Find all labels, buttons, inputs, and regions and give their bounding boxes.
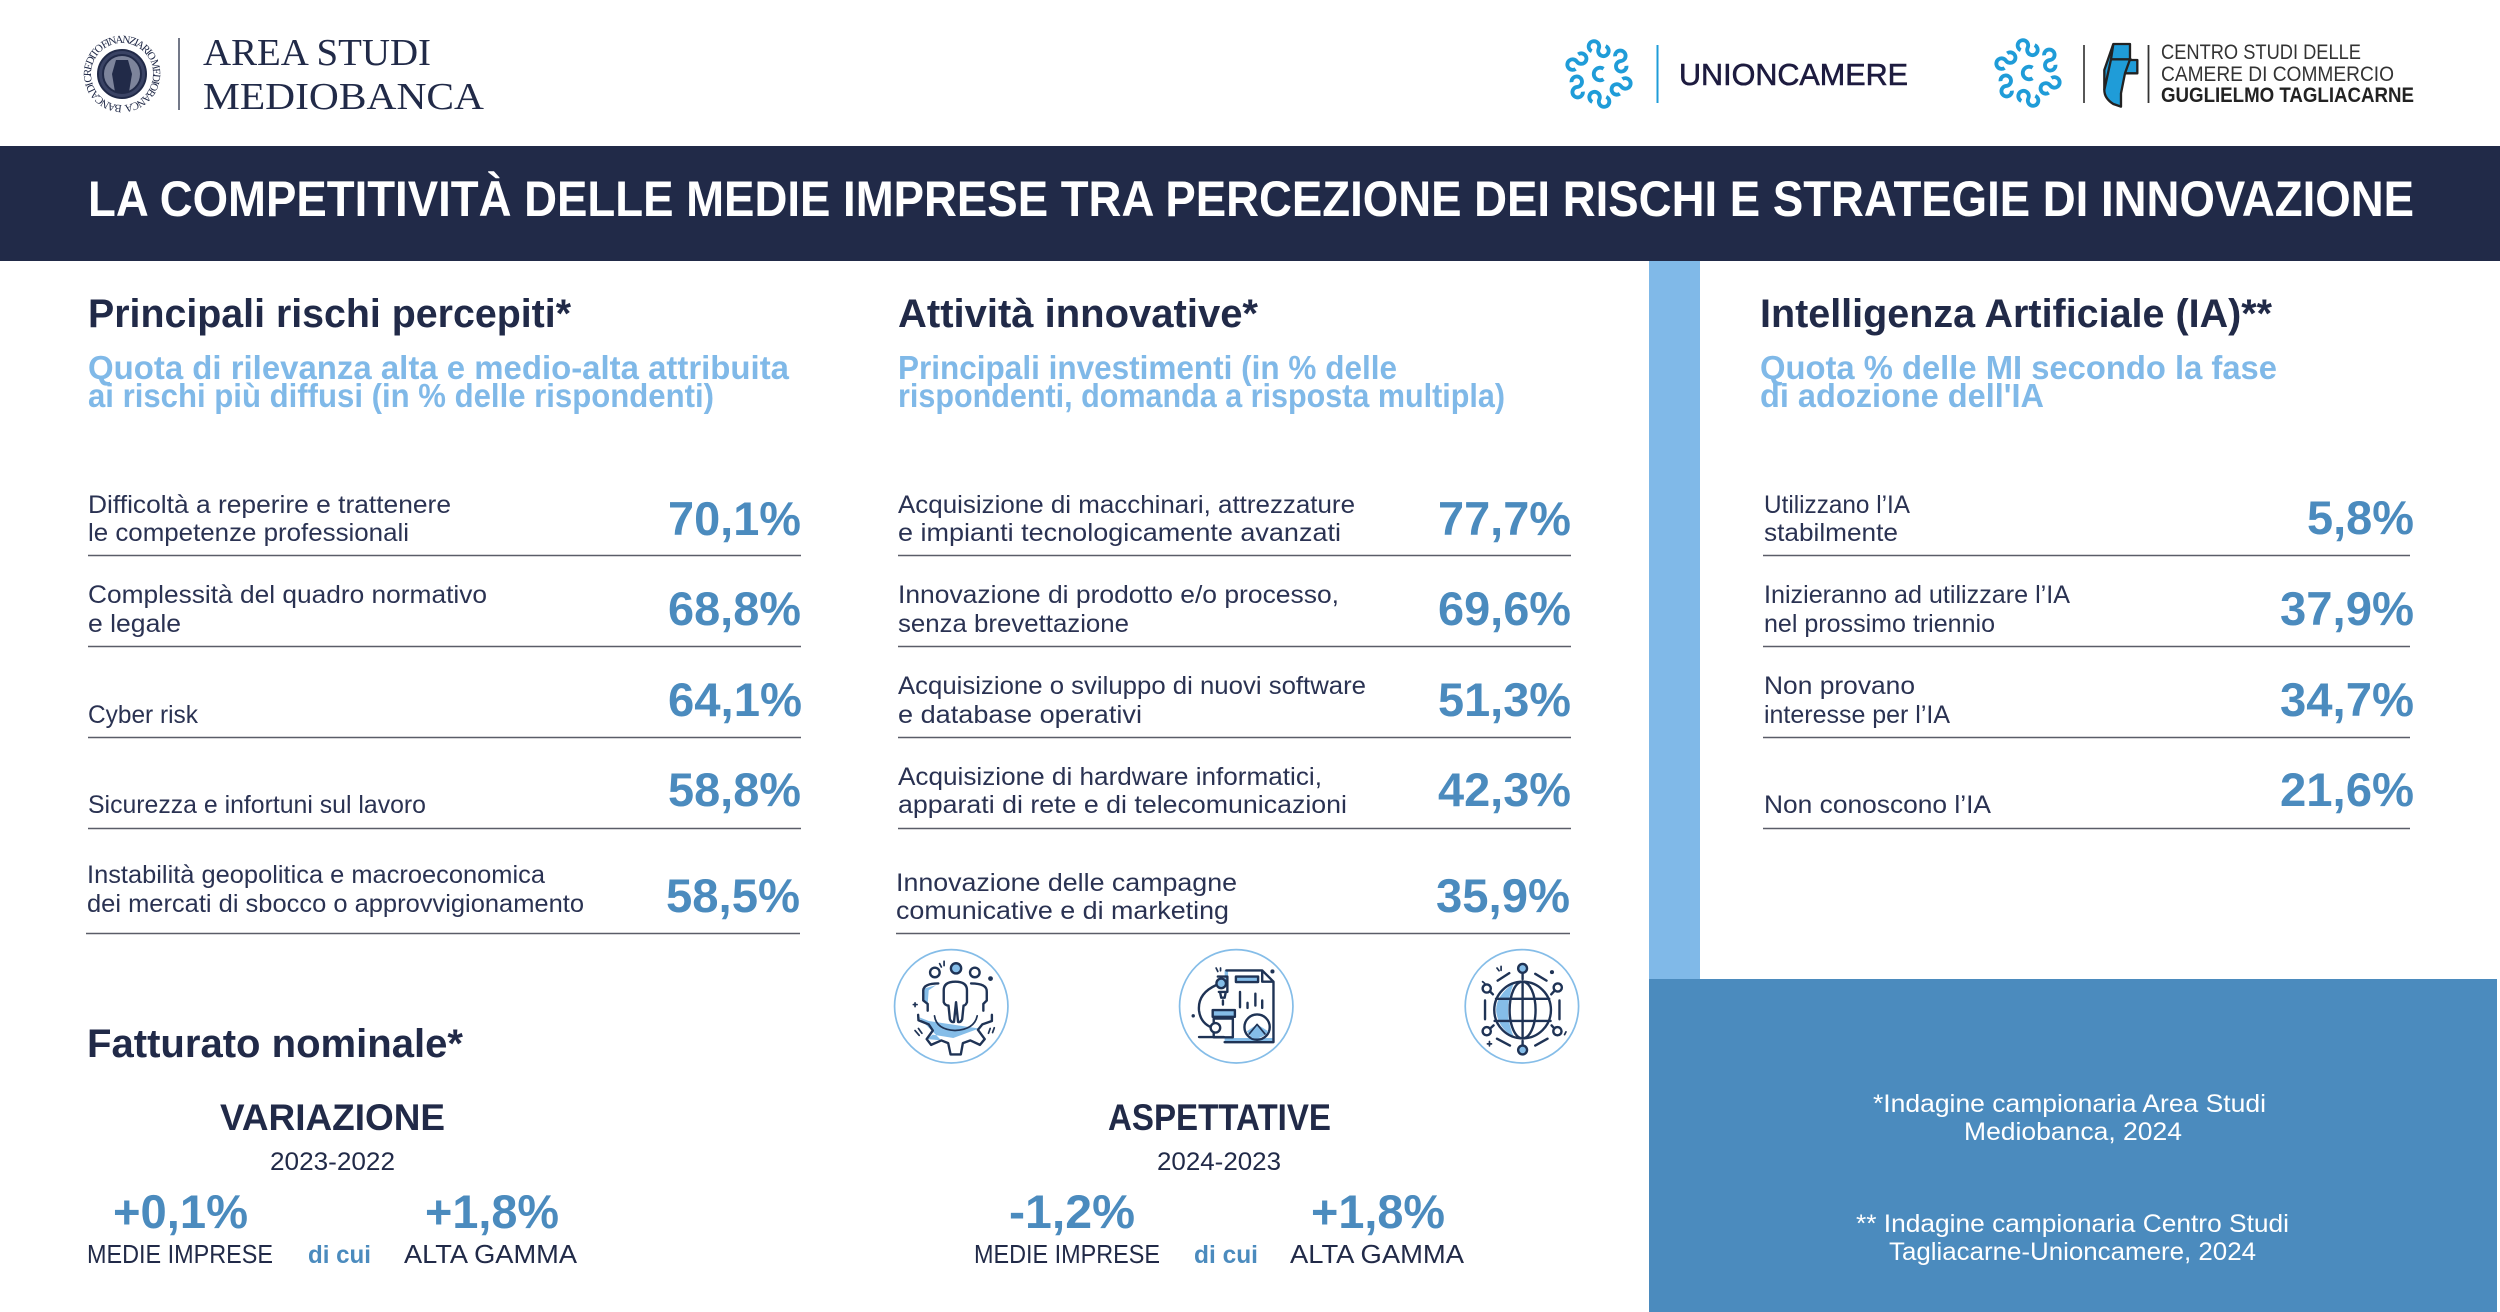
row: hardware: 42,3% (1438, 763, 1571, 816)
subheading (898, 349, 1505, 414)
block: aspettative: 2024-2023 (1157, 1148, 1281, 1176)
row: innovazione prodotto: 69,6% (1438, 582, 1571, 635)
logo: Unioncamere (1565, 39, 1908, 109)
panel: intelligenza artificiale (1760, 292, 2414, 828)
row: competenze: le competenze professionali (88, 519, 409, 547)
row: normativa: 68,8% (668, 582, 801, 635)
row: inizieranno: nel prossimo triennio (1764, 610, 1995, 638)
icon: Unioncamere swirl (1565, 39, 1633, 109)
block: variazione: di cui (308, 1241, 371, 1269)
row: normativa: e legale (88, 610, 181, 638)
text: Centro Studi delle: CENTRO STUDI DELLE (2161, 41, 2361, 64)
block: aspettative: +1,8% (1311, 1185, 1445, 1238)
icon: people and gear (895, 950, 1008, 1063)
block: variazione: MEDIE IMPRESE (87, 1239, 273, 1269)
row: non provano (1763, 672, 2414, 738)
subheading: rispondenti, domanda a risposta multipla) (898, 377, 1505, 414)
row: macchinari: Acquisizione di macchinari, attrezzature (898, 491, 1355, 519)
footnote: Area Studi: *Indagine campionaria Area Studi (1873, 1090, 2266, 1118)
block: aspettative: -1,2% (1009, 1185, 1135, 1238)
subheading (88, 349, 790, 414)
row: non provano: Non provano (1764, 672, 1915, 700)
text: Guglielmo Tagliacarne: GUGLIELMO TAGLIACARNE (2161, 84, 2414, 107)
row: cyber risk: 64,1% (668, 673, 802, 726)
text: Mediobanca: MEDIOBANCA (203, 76, 485, 118)
block: aspettative: ALTA GAMMA (1290, 1239, 1465, 1269)
icon: Unioncamere swirl (1994, 38, 2062, 108)
row: campagne: Innovazione delle campagne (896, 869, 1237, 897)
logo: Centro Studi Tagliacarne (1994, 38, 2414, 108)
subheading (1760, 349, 2277, 414)
row: software: Acquisizione o sviluppo di nuovi software (898, 672, 1366, 700)
subheading: ai rischi più diffusi (in % delle rispondenti) (88, 377, 714, 414)
text: Area Studi: AREA STUDI (203, 32, 431, 74)
row: utilizzano (1763, 491, 2414, 556)
text: Camere di Commercio: CAMERE DI COMMERCIO (2161, 63, 2394, 86)
row: software: e database operativi (898, 701, 1142, 729)
row: cyber risk (88, 673, 802, 738)
row: campagne: comunicative e di marketing (896, 897, 1229, 925)
row: sicurezza: Sicurezza e infortuni sul lavoro (88, 791, 426, 819)
title banner (0, 146, 2500, 261)
block: variazione: 2023-2022 (270, 1148, 395, 1176)
row: macchinari (898, 491, 1571, 556)
block: variazione: +1,8% (425, 1185, 559, 1238)
icon: microscope and report (1180, 950, 1293, 1063)
text: Unioncamere: UNIONCAMERE (1679, 57, 1908, 92)
heading: Intelligenza Artificiale (IA)** (1760, 292, 2272, 336)
subheading: Quota % delle MI secondo la fase (1760, 349, 2277, 386)
block: variazione (87, 1097, 578, 1269)
row: competenze (88, 491, 801, 556)
block: aspettative (974, 1097, 1465, 1269)
row: campagne (896, 869, 1570, 934)
row: normativa: Complessità del quadro normativo (88, 581, 487, 609)
row: utilizzano: Utilizzano l’IA (1764, 491, 1910, 519)
footnote: Area Studi (1873, 1090, 2266, 1146)
subheading: di adozione dell'IA (1760, 377, 2044, 414)
block: variazione: +0,1% (113, 1185, 248, 1238)
row: non conoscono: 21,6% (2280, 763, 2414, 816)
row: innovazione prodotto (898, 581, 1571, 646)
footnote: Area Studi: Mediobanca, 2024 (1964, 1118, 2182, 1146)
row: inizieranno: 37,9% (2280, 582, 2414, 635)
row: utilizzano: 5,8% (2307, 491, 2414, 544)
panel: attività innovative (896, 292, 1571, 934)
row: sicurezza: 58,8% (668, 763, 801, 816)
row: campagne: 35,9% (1436, 869, 1570, 922)
block: variazione: ALTA GAMMA (404, 1239, 578, 1269)
row: hardware (898, 763, 1571, 828)
row: non conoscono: Non conoscono l’IA (1764, 791, 1991, 819)
row: competenze: Difficoltà a reperire e trattenere (88, 491, 451, 519)
block: aspettative: MEDIE IMPRESE (974, 1239, 1160, 1269)
icon: Mediobanca seal: BANCA DI CREDITO FINANZIARIO MEDIOBANCA (84, 36, 160, 112)
row: hardware: Acquisizione di hardware informatici, (898, 763, 1322, 791)
row: innovazione prodotto: senza brevettazione (898, 610, 1129, 638)
row: macchinari: 77,7% (1438, 492, 1571, 545)
row: sicurezza (88, 763, 801, 828)
panel: note metodologiche (1649, 979, 2497, 1312)
heading: Principali rischi percepiti* (88, 292, 571, 336)
block: aspettative: ASPETTATIVE (1108, 1097, 1331, 1138)
icon: pen nib (2104, 44, 2137, 107)
subheading: Quota di rilevanza alta e medio-alta attribuita (88, 349, 790, 386)
row: software (898, 672, 1571, 738)
row: inizieranno: Inizieranno ad utilizzare l’IA (1764, 581, 2070, 609)
block: aspettative: di cui (1194, 1241, 1258, 1269)
subheading: Principali investimenti (in % delle (898, 349, 1397, 386)
footnote: Centro Studi (1856, 1210, 2289, 1266)
heading: Fatturato nominale* (87, 1022, 463, 1066)
row: non conoscono (1763, 763, 2414, 828)
row: instabilità: Instabilità geopolitica e macroeconomica (87, 861, 545, 889)
row: utilizzano: stabilmente (1764, 519, 1898, 547)
row: innovazione prodotto: Innovazione di prodotto e/o processo, (898, 581, 1339, 609)
row: instabilità (86, 861, 800, 934)
row: non provano: interesse per l’IA (1764, 701, 1950, 729)
row: non provano: 34,7% (2280, 673, 2414, 726)
panel: principali rischi percepiti (86, 292, 802, 934)
row: macchinari: e impianti tecnologicamente avanzati (898, 519, 1341, 547)
row: hardware: apparati di rete e di telecomunicazioni (898, 791, 1347, 819)
row: normativa (88, 581, 801, 646)
logo: Area Studi Mediobanca (84, 32, 485, 118)
row: instabilità: 58,5% (666, 869, 800, 922)
footnote: Centro Studi: Tagliacarne-Unioncamere, 2024 (1889, 1238, 2256, 1266)
row: cyber risk: Cyber risk (88, 701, 198, 729)
row: instabilità: dei mercati di sbocco o approvvigionamento (87, 890, 584, 918)
block: variazione: VARIAZIONE (220, 1097, 445, 1138)
footnote: Centro Studi: ** Indagine campionaria Centro Studi (1856, 1210, 2289, 1238)
panel: fatturato nominale (87, 1022, 1465, 1269)
row: competenze: 70,1% (668, 492, 801, 545)
accent bar (1649, 261, 1700, 981)
heading: Attività innovative* (898, 292, 1258, 336)
icon: globe network (1465, 950, 1579, 1063)
row: software: 51,3% (1438, 673, 1571, 726)
row: inizieranno (1763, 581, 2414, 646)
